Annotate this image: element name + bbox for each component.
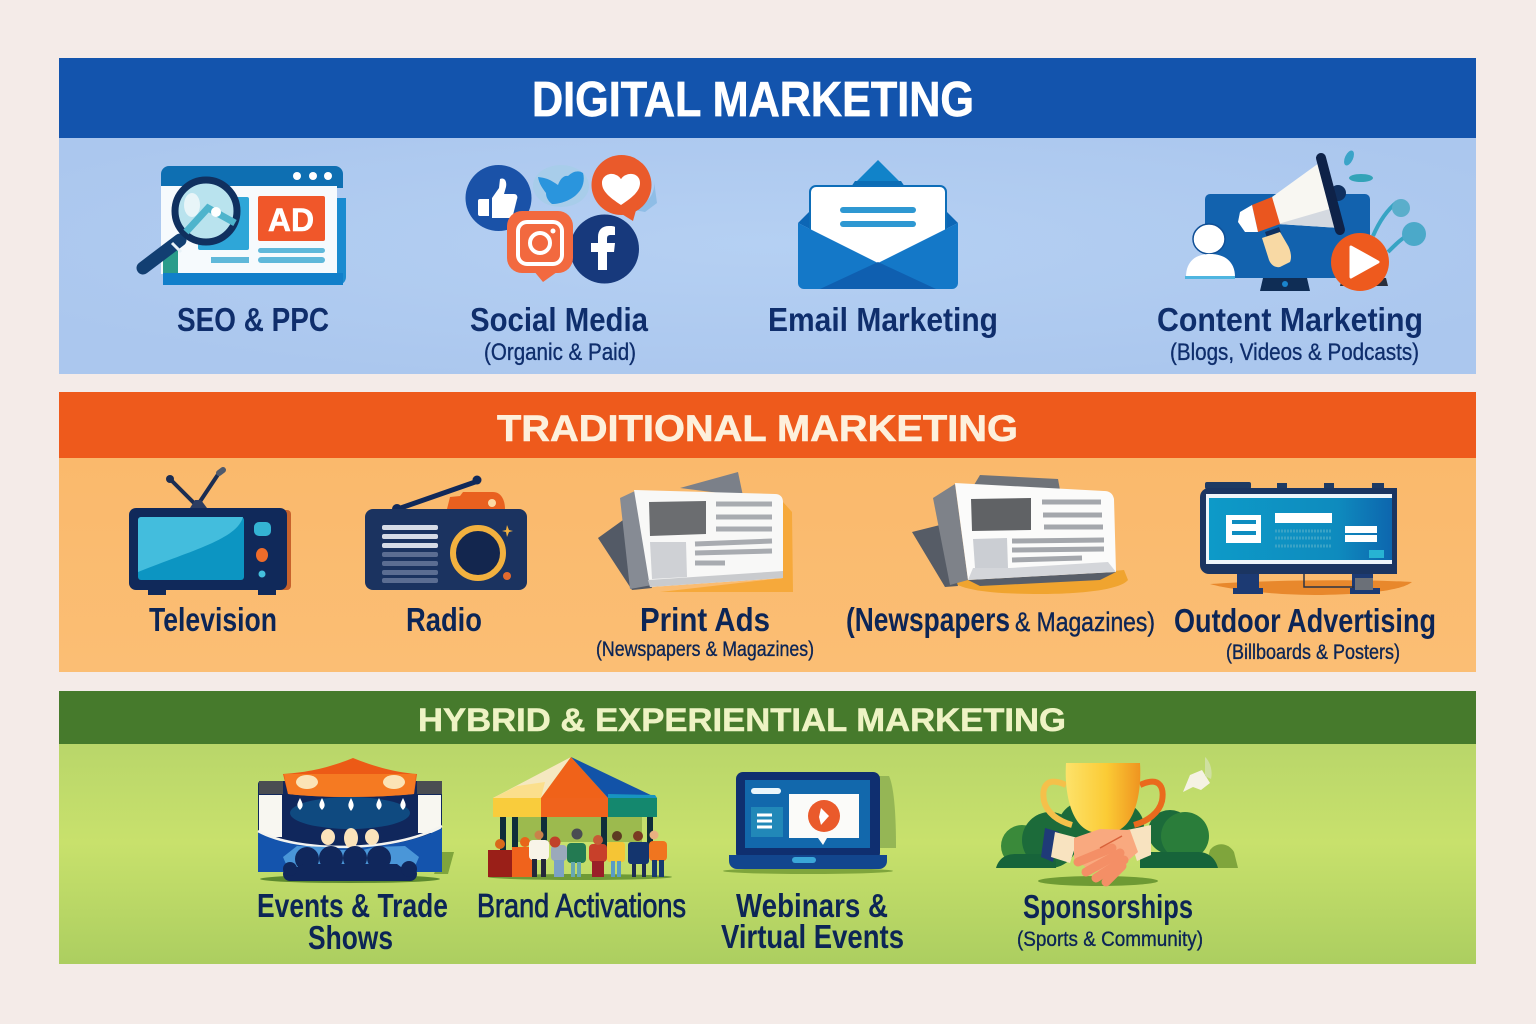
label: Events & Trade Shows: Events & Trade — [257, 887, 448, 924]
label: Content Marketing (Blogs, Videos & Podcasts): Content Marketing — [1157, 301, 1423, 338]
label: Brand Activations: Brand Activations — [477, 887, 686, 924]
panel: traditional marketing — [59, 392, 1476, 672]
label: Webinars & Virtual Events: Webinars & — [736, 887, 888, 924]
icon: event stage with audience — [258, 758, 454, 883]
label: Content Marketing (Blogs, Videos & Podcasts): (Blogs, Videos & Podcasts) — [1170, 339, 1419, 366]
label: SEO & PPC: SEO & PPC — [177, 301, 329, 338]
hybrid marketing header bar — [59, 691, 1476, 744]
label: Outdoor Advertising (Billboards & Posters): Outdoor Advertising — [1174, 602, 1436, 639]
panel: hybrid & experiential marketing — [59, 691, 1476, 964]
icon: billboard — [1200, 482, 1412, 595]
icon: newspaper 2 — [912, 475, 1128, 594]
icon: radio — [365, 476, 527, 590]
label: Webinars & Virtual Events — [721, 887, 904, 955]
label: Television: Television — [149, 601, 277, 638]
label: Print Ads (Newspapers & Magazines) — [596, 601, 814, 661]
icon: content marketing megaphone and monitor — [1185, 149, 1426, 291]
icon: SEO browser window with magnifier — [143, 166, 346, 285]
label: Events & Trade Shows — [257, 887, 448, 956]
digital marketing header bar — [59, 58, 1476, 138]
label: Content Marketing (Blogs, Videos & Podcasts) — [1157, 301, 1423, 366]
heading: hybrid & experiential marketing: HYBRID & EXPERIENTIAL MARKETING — [418, 702, 1066, 738]
icon: email envelope — [798, 160, 958, 289]
label: Outdoor Advertising (Billboards & Posters): (Billboards & Posters) — [1226, 641, 1400, 664]
heading: digital marketing: DIGITAL MARKETING — [532, 73, 974, 127]
icon: social media cluster — [466, 155, 657, 284]
label: Social Media (Organic & Paid) — [470, 301, 649, 366]
icon: SEO browser window with magnifier: AD — [268, 202, 314, 238]
label: Outdoor Advertising (Billboards & Posters) — [1174, 602, 1436, 664]
panel: digital marketing — [59, 58, 1476, 374]
label: Print Ads (Newspapers & Magazines): (Newspapers & Magazines) — [596, 638, 814, 661]
label: Print Ads (Newspapers & Magazines): Print Ads — [640, 601, 770, 638]
label: (Newspapers & Magazines) — [846, 601, 1155, 638]
heading: traditional marketing: TRADITIONAL MARKETING — [497, 408, 1018, 449]
label: Social Media (Organic & Paid): (Organic & Paid) — [484, 339, 636, 366]
label: Sponsorships (Sports & Community): Sponsorships — [1023, 888, 1193, 925]
icon: newspaper 1 — [598, 472, 793, 592]
label: Radio: Radio — [406, 601, 482, 638]
traditional marketing header bar — [59, 392, 1476, 458]
label: Webinars & Virtual Events: Virtual Events — [721, 918, 904, 955]
label: (Newspapers & Magazines): & Magazines) — [1015, 607, 1155, 637]
icon: sponsorship trophy and handshake — [996, 757, 1238, 886]
label: (Newspapers & Magazines): (Newspapers — [846, 601, 1010, 638]
icon: webinar laptop — [723, 772, 896, 874]
label: Email Marketing: Email Marketing — [768, 301, 998, 338]
label: Events & Trade Shows: Shows — [308, 919, 393, 956]
label: Social Media (Organic & Paid): Social Media — [470, 301, 649, 338]
label: Sponsorships (Sports & Community): (Sports & Community) — [1017, 928, 1203, 951]
icon: brand activation tent with people — [488, 757, 672, 880]
label: Sponsorships (Sports & Community) — [1017, 888, 1203, 951]
icon: television — [129, 470, 291, 595]
